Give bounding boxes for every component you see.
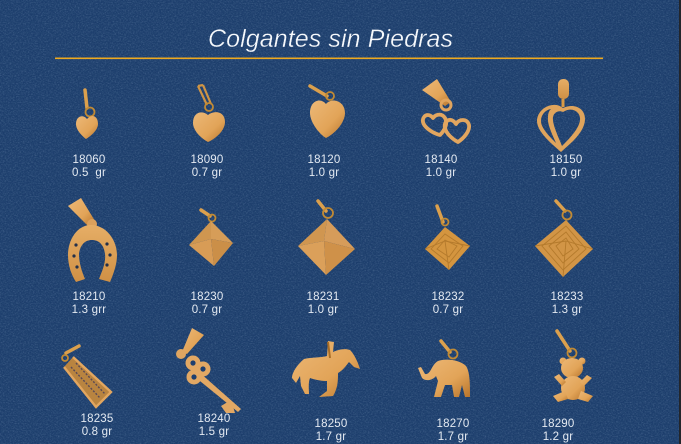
label 18235: 0.8 gr — [82, 426, 112, 438]
label 18120: 18120 — [308, 154, 340, 166]
label 18150: 1.0 gr — [551, 167, 581, 179]
label 18210 — [72, 291, 106, 316]
label 18235 — [81, 413, 113, 438]
pendant 18231: large diamond — [298, 201, 355, 275]
pendant 18060: small heart — [76, 90, 98, 139]
label 18210: 1.3 grr — [72, 304, 106, 316]
label 18230: 18230 — [191, 291, 223, 303]
pendant 18232: ribbed diamond — [425, 206, 470, 270]
label 18232: 0.7 gr — [433, 304, 463, 316]
label 18150: 18150 — [550, 154, 582, 166]
label 18090: 0.7 gr — [192, 167, 222, 179]
label 18232: 18232 — [432, 291, 464, 303]
pendant 18230: diamond — [189, 210, 233, 266]
pendant 18210: horseshoe — [68, 198, 117, 282]
label 18140: 1.0 gr — [426, 167, 456, 179]
pendant 18140: two hearts — [422, 79, 469, 142]
label 18235: 18235 — [81, 413, 113, 425]
label 18240: 18240 — [198, 413, 230, 425]
label 18240: 1.5 gr — [199, 426, 229, 438]
label 18060 — [72, 154, 106, 179]
label 18120: 1.0 gr — [309, 167, 339, 179]
label 18140 — [425, 154, 457, 179]
label 18231 — [307, 291, 339, 316]
label 18060: 18060 — [73, 154, 105, 166]
label 18250: 1.7 gr — [316, 431, 346, 443]
label 18090: 18090 — [191, 154, 223, 166]
pendant 18240: key — [176, 328, 241, 413]
label 18120 — [308, 154, 340, 179]
title: Colgantes sin Piedras — [208, 25, 453, 53]
label 18270: 18270 — [437, 418, 469, 430]
label 18250: 18250 — [315, 418, 347, 430]
label 18231: 1.0 gr — [308, 304, 338, 316]
pendant 18120: heart — [310, 86, 345, 138]
pendant 18250: horse — [292, 341, 360, 397]
label 18290 — [542, 418, 574, 443]
label 18231: 18231 — [307, 291, 339, 303]
label 18232 — [432, 291, 464, 316]
pendant 18235: filigree bar — [62, 346, 111, 407]
label 18150 — [550, 154, 582, 179]
label 18240 — [198, 413, 230, 438]
title underline — [55, 58, 603, 59]
pendant 18150: open heart — [537, 79, 585, 152]
label 18233: 1.3 gr — [552, 304, 582, 316]
pendant 18290: teddy bear — [553, 331, 593, 402]
label 18233: 18233 — [551, 291, 583, 303]
label 18270 — [437, 418, 469, 443]
label 18230: 0.7 gr — [192, 304, 222, 316]
label 18210: 18210 — [73, 291, 105, 303]
label 18060: 0.5 gr — [72, 167, 106, 179]
label 18230 — [191, 291, 223, 316]
label 18140: 18140 — [425, 154, 457, 166]
pendant 18090: heart — [193, 85, 225, 142]
label 18290: 1.2 gr — [543, 431, 573, 443]
label 18250 — [315, 418, 347, 443]
label 18233 — [551, 291, 583, 316]
label 18290: 18290 — [542, 418, 574, 430]
pendant 18270: elephant — [418, 341, 470, 397]
pendant 18233: large ribbed diamond — [535, 201, 593, 277]
label 18090 — [191, 154, 223, 179]
label 18270: 1.7 gr — [438, 431, 468, 443]
